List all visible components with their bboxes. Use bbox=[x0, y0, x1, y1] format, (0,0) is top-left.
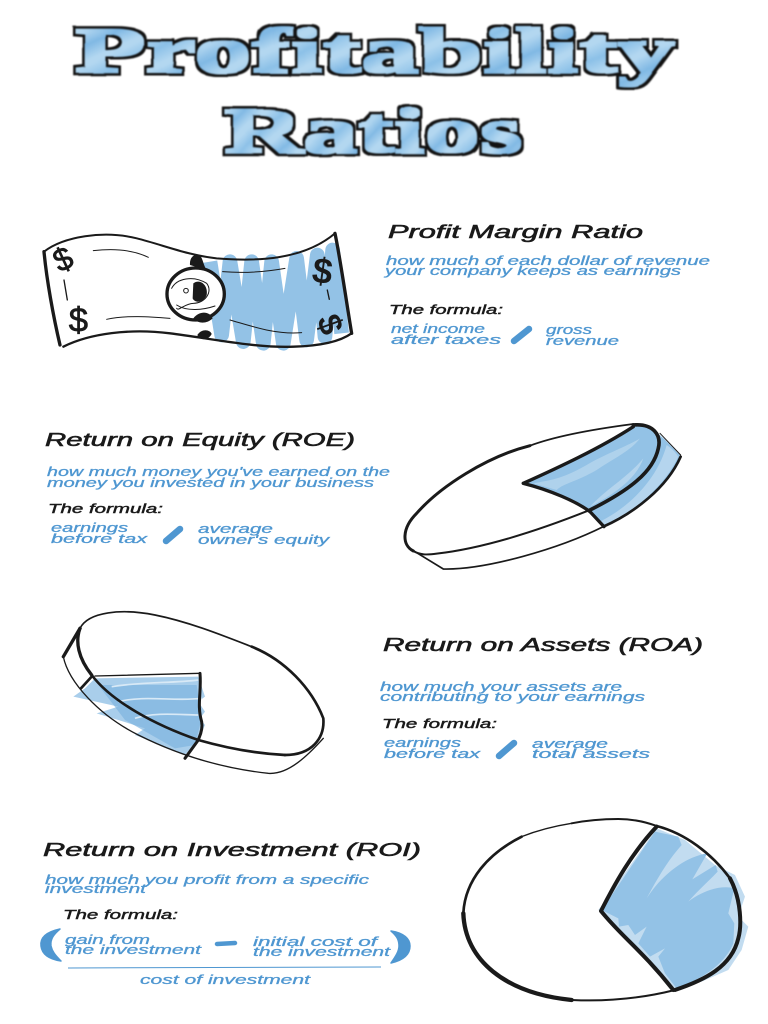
label: the formula: The formula: bbox=[389, 302, 504, 317]
chart: tilted pie left bbox=[63, 612, 323, 773]
formula: return on investment bbox=[41, 929, 410, 987]
formula: return on equity: earnings bbox=[51, 521, 128, 535]
formula: return on equity: owner's equity bbox=[198, 533, 330, 547]
formula: profit margin: gross bbox=[546, 323, 592, 337]
text: profit margin description: your company keeps as earnings bbox=[383, 264, 681, 278]
text: return on equity description bbox=[47, 465, 390, 490]
icon: dollar bill bbox=[44, 233, 352, 347]
formula: return on assets: total assets bbox=[532, 747, 650, 761]
formula: return on assets: average bbox=[532, 737, 608, 751]
title: Profitability bbox=[75, 15, 675, 86]
formula: return on assets bbox=[384, 736, 650, 761]
icon: dollar bill: $ bbox=[47, 239, 79, 279]
chart: tilted pie top right bbox=[405, 424, 681, 569]
icon: bill portrait medallion bbox=[167, 255, 224, 339]
panel: return on equity bbox=[45, 430, 390, 547]
text: return on assets description: how much your assets are bbox=[380, 680, 622, 694]
label: the formula: The formula: bbox=[382, 716, 498, 731]
text: return on assets description bbox=[380, 680, 645, 704]
label: the formula: The formula: bbox=[48, 501, 164, 516]
formula: return on investment: cost of investment bbox=[140, 973, 311, 987]
panel: return on investment bbox=[41, 840, 421, 987]
text: profit margin description bbox=[383, 254, 710, 278]
panel: profit margin ratio bbox=[383, 222, 710, 348]
formula: return on assets: before tax bbox=[384, 747, 481, 761]
text: profit margin description: how much of each dollar of revenue bbox=[386, 254, 710, 268]
icon: dollar bill: $ bbox=[69, 301, 88, 339]
formula: profit margin: after taxes bbox=[391, 333, 501, 347]
formula: return on investment: the investment bbox=[253, 945, 391, 959]
icon: dollar bill: $ bbox=[310, 249, 335, 293]
formula: return on equity: average bbox=[198, 522, 273, 536]
text: return on assets description: contributing to your earnings bbox=[380, 690, 645, 704]
heading: return on investment: Return on Investment (ROI) bbox=[43, 840, 421, 860]
formula: return on equity: before tax bbox=[51, 532, 148, 546]
panel: return on assets bbox=[380, 635, 703, 761]
heading: return on equity: Return on Equity (ROE) bbox=[45, 430, 355, 450]
heading: profit margin ratio: Profit Margin Ratio bbox=[388, 222, 643, 242]
heading: return on assets: Return on Assets (ROA) bbox=[383, 635, 703, 655]
formula: return on equity bbox=[51, 521, 330, 547]
formula: return on investment: the investment bbox=[65, 943, 202, 957]
icon: dollar bill: $ bbox=[309, 310, 350, 340]
title: Ratios bbox=[224, 95, 522, 166]
formula: return on investment: initial cost of bbox=[253, 935, 380, 949]
formula: profit margin bbox=[391, 322, 619, 348]
text: return on investment description bbox=[45, 873, 370, 896]
text: return on investment description: investment bbox=[45, 882, 147, 896]
title bbox=[75, 15, 675, 166]
formula: profit margin: net income bbox=[391, 322, 485, 336]
formula: profit margin: revenue bbox=[546, 334, 619, 348]
formula: return on assets: earnings bbox=[384, 736, 461, 750]
text: return on investment description: how much you profit from a specific bbox=[45, 873, 370, 887]
text: return on equity description: money you invested in your business bbox=[47, 476, 374, 490]
label: the formula: The formula: bbox=[63, 907, 179, 922]
formula: return on investment: gain from bbox=[65, 933, 150, 947]
chart: oval pie bottom right bbox=[463, 819, 748, 1000]
text: return on equity description: how much money you've earned on the bbox=[47, 465, 390, 479]
